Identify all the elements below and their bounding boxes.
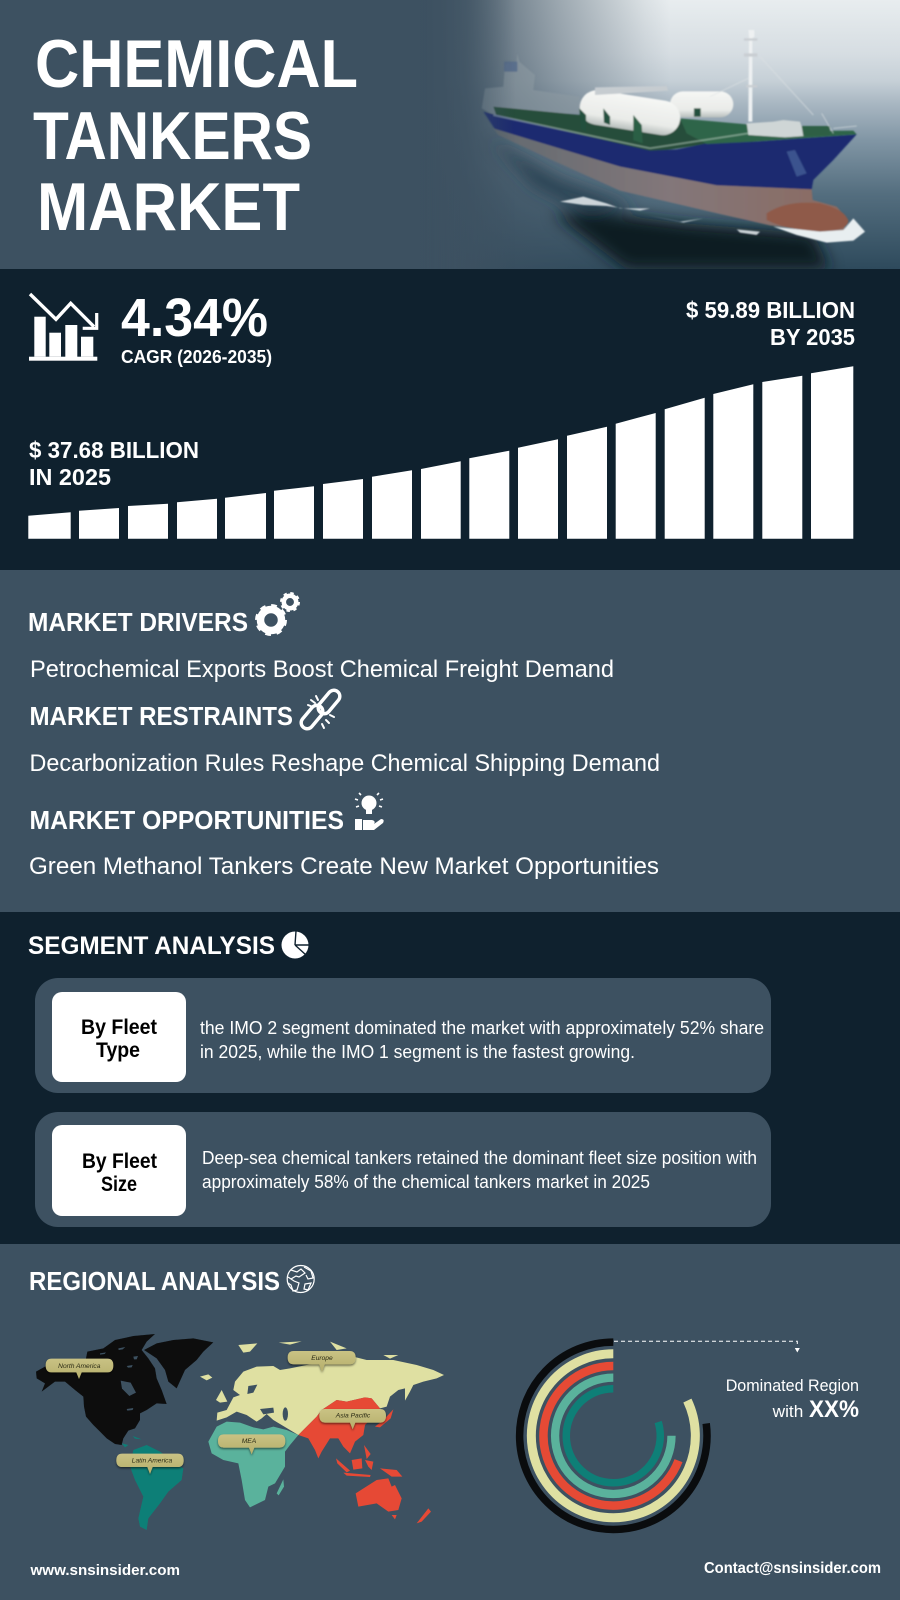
description: in 2025, while the IMO 1 segment is the fastest growing. [200,1042,635,1062]
card: by fleet size [35,1112,771,1227]
restraint text: Decarbonization Rules Reshape Chemical Shipping Demand [30,750,660,777]
panel: segment analysis [0,912,900,1244]
description [200,1018,764,1062]
label box [52,1125,186,1216]
CAGR label: CAGR (2026-2035) [121,346,272,367]
region: MEA [208,1422,298,1507]
heading: segment analysis: SEGMENT ANALYSIS [28,932,275,960]
panel: regional analysis [0,1244,900,1600]
label box: Type [96,1039,140,1062]
heading: market restraints: MARKET RESTRAINTS [30,703,293,731]
seas [247,1385,288,1421]
label: Asia Pacific [319,1409,386,1429]
label: MEA: MEA [242,1438,257,1445]
driver text: Petrochemical Exports Boost Chemical Freight Demand [30,656,614,683]
start value: IN 2025 [29,464,111,490]
region: Asia Pacific [298,1397,431,1523]
start value [29,437,199,490]
opportunity text: Green Methanol Tankers Create New Market Opportunities [29,853,659,880]
description: approximately 58% of the chemical tankers market in 2025 [202,1172,650,1192]
dominated region callout: with [772,1402,803,1421]
heading: market opportunities: MARKET OPPORTUNITIES [30,807,344,835]
region: North America [36,1334,213,1445]
start value: $ 37.68 BILLION [29,437,199,463]
CAGR value: 4.34% [121,288,268,348]
label: North America [46,1359,113,1379]
label: Asia Pacific: Asia Pacific [335,1413,371,1420]
label: Europe: Europe [311,1355,333,1362]
region: Latin America [122,1436,183,1530]
dominated region callout: XX% [809,1396,859,1423]
website: www.snsinsider.com [29,1562,180,1579]
icon: broken chain [299,688,342,731]
title: MARKET [37,169,300,245]
icon: globe [287,1266,314,1292]
label: Latin America: Latin America [132,1458,173,1465]
heading: regional analysis: REGIONAL ANALYSIS [29,1268,280,1296]
label: Latin America [116,1454,184,1474]
dominated region callout: Dominated Region [726,1376,859,1395]
panel: market dynamics [0,570,900,912]
heading: market drivers: MARKET DRIVERS [28,609,248,637]
end value: BY 2035 [770,324,855,350]
label box: Size [101,1173,137,1196]
panel: market size [0,269,900,570]
label: Europe [288,1351,356,1372]
bar chart [28,366,853,539]
icon: pie chart [282,931,309,958]
end value: $ 59.89 BILLION [686,297,855,323]
label box: By Fleet [82,1150,157,1173]
panel: header [0,0,900,270]
dashed leader arrow [614,1341,800,1352]
end value [686,297,855,350]
description: the IMO 2 segment dominated the market with approximately 52% share [200,1018,764,1038]
contact email: Contact@snsinsider.com [704,1560,881,1577]
icon: declining chart [29,294,97,361]
label box [52,992,186,1082]
label box: By Fleet [81,1016,157,1039]
world map [36,1334,444,1530]
icon: idea in hand [355,793,384,830]
title: TANKERS [33,98,312,174]
label: North America: North America [58,1363,101,1370]
radial bar chart [520,1342,707,1530]
title: CHEMICAL [35,26,358,102]
label: MEA [218,1434,285,1454]
description: Deep-sea chemical tankers retained the dominant fleet size position with [202,1148,757,1168]
North America inland waters [100,1347,138,1411]
description [202,1148,757,1192]
region: Europe and North Asia [200,1341,444,1435]
ship photo [420,0,900,269]
card: by fleet type [35,978,771,1093]
title [33,26,358,245]
icon: gears [256,593,299,634]
dominated region callout [726,1376,859,1423]
